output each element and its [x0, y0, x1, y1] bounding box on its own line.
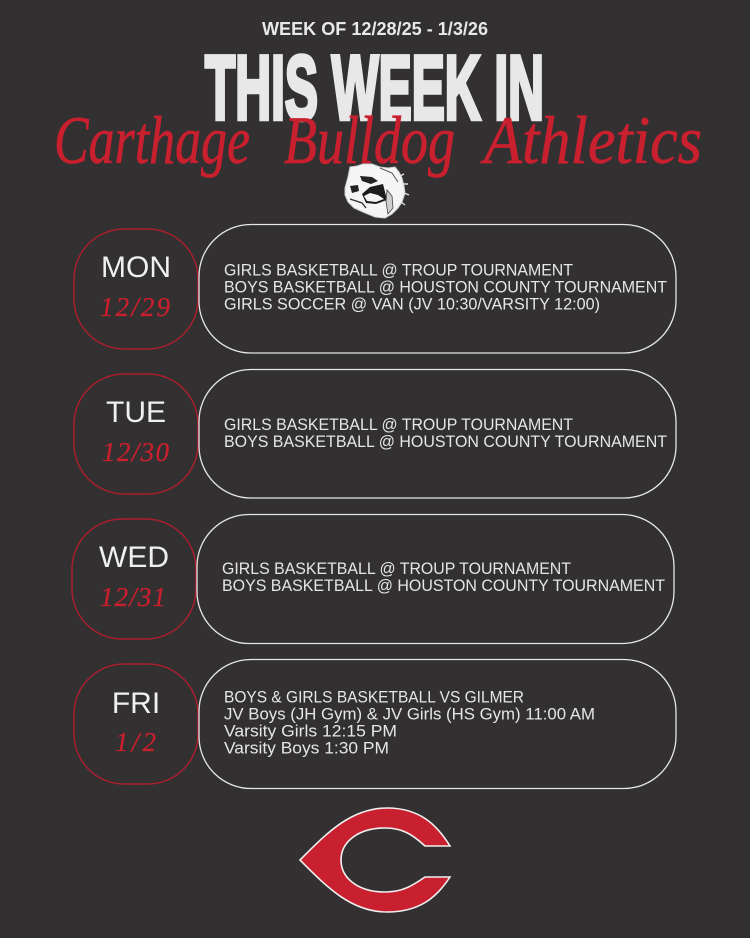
script heading: Carthage Bulldog Athletics — [54, 102, 702, 178]
day badge: Monday: MON — [101, 251, 171, 284]
panel: Wednesday events: BOYS BASKETBALL @ HOUSTON COUNTY TOURNAMENT — [222, 577, 665, 595]
script heading: Carthage Bulldog Athletics: Bulldog — [284, 102, 455, 178]
icon: bulldog mascot — [345, 164, 409, 218]
panel: Monday events: BOYS BASKETBALL @ HOUSTON COUNTY TOURNAMENT — [224, 278, 667, 296]
script heading: Carthage Bulldog Athletics: Carthage — [54, 102, 250, 178]
day badge: Wednesday: 12/31 — [100, 582, 166, 612]
row: Monday — [74, 224, 676, 353]
row: Friday — [74, 660, 676, 788]
week date line: WEEK OF 12/28/25 - 1/3/26 — [262, 19, 488, 39]
panel: Tuesday events — [199, 370, 676, 498]
day badge: Friday: FRI — [112, 687, 160, 720]
panel: Wednesday events: GIRLS BASKETBALL @ TROUP TOURNAMENT — [222, 560, 571, 578]
row: Wednesday — [72, 514, 674, 644]
panel: Monday events: GIRLS BASKETBALL @ TROUP TOURNAMENT — [224, 262, 573, 280]
panel: Tuesday events: GIRLS BASKETBALL @ TROUP TOURNAMENT — [224, 416, 573, 434]
panel: Monday events: GIRLS SOCCER @ VAN (JV 10:30/VARSITY 12:00) — [224, 296, 600, 314]
panel: Friday events: BOYS & GIRLS BASKETBALL VS GILMER — [224, 688, 524, 706]
panel: Friday events: Varsity Girls 12:15 PM — [224, 722, 397, 740]
icon: Carthage C logo — [300, 808, 450, 912]
script heading: Carthage Bulldog Athletics: Athletics — [480, 102, 702, 178]
row: Tuesday — [74, 370, 676, 498]
day badge: Friday: 1/2 — [115, 727, 156, 757]
panel: Friday events: Varsity Boys 1:30 PM — [224, 740, 389, 758]
panel: Friday events: JV Boys (JH Gym) & JV Girls (HS Gym) 11:00 AM — [224, 706, 595, 724]
day badge: Tuesday — [74, 374, 198, 494]
day badge: Tuesday: TUE — [106, 396, 166, 429]
panel: Tuesday events: BOYS BASKETBALL @ HOUSTON COUNTY TOURNAMENT — [224, 433, 667, 451]
day badge: Wednesday — [72, 519, 196, 639]
panel: Wednesday events — [197, 514, 674, 644]
day badge: Friday — [74, 664, 198, 784]
day badge: Monday: 12/29 — [100, 292, 170, 322]
panel: Monday events — [199, 224, 676, 353]
panel: Friday events — [199, 660, 676, 788]
day badge: Wednesday: WED — [99, 541, 169, 574]
day badge: Tuesday: 12/30 — [102, 437, 170, 467]
day badge: Monday — [74, 229, 198, 349]
